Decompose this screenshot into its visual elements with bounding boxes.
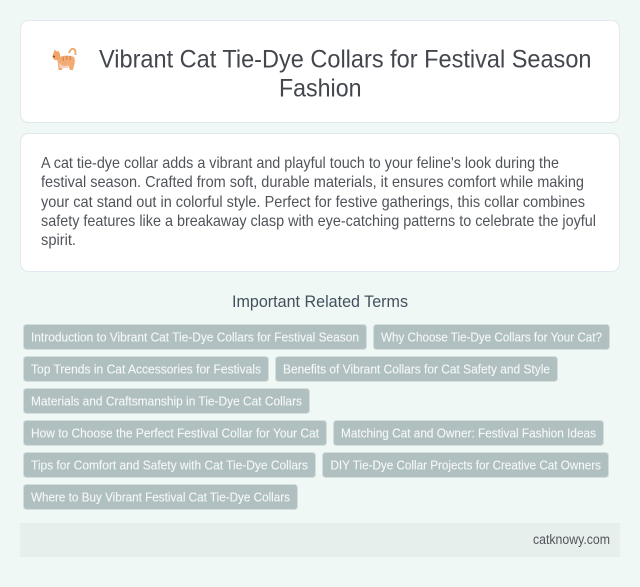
tag: Top Trends in Cat Accessories for Festivals (31, 362, 261, 376)
tag (334, 420, 604, 446)
tag: Where to Buy Vibrant Festival Cat Tie-Dye Collars (31, 490, 290, 504)
tag: Benefits of Vibrant Collars for Cat Safety and Style (283, 362, 550, 376)
tag (24, 324, 366, 350)
tag: Tips for Comfort and Safety with Cat Tie-Dye Collars (31, 458, 308, 472)
description text: festival season. Crafted from soft, durable materials, it ensures comfort while making (41, 174, 584, 191)
description text: spirit. (41, 232, 76, 249)
tag: How to Choose the Perfect Festival Collar for Your Cat (31, 426, 319, 440)
footer (20, 523, 620, 557)
heading: important related terms: Important Related Terms (232, 293, 408, 311)
description text: A cat tie-dye collar adds a vibrant and playful touch to your feline's look during the (41, 155, 559, 172)
footer: catknowy.com (533, 532, 610, 547)
tag (374, 324, 610, 350)
icon: cat (52, 49, 76, 70)
tag (24, 388, 310, 414)
description text: safety features like a breakaway clasp with eye-catching patterns to celebrate the joyful (41, 213, 596, 230)
tag (24, 484, 298, 510)
tag: Matching Cat and Owner: Festival Fashion Ideas (341, 426, 596, 440)
tag: Materials and Craftsmanship in Tie-Dye Cat Collars (31, 394, 302, 408)
title text (99, 46, 592, 102)
tag: DIY Tie-Dye Collar Projects for Creative Cat Owners (330, 458, 601, 472)
tag: Introduction to Vibrant Cat Tie-Dye Collars for Festival Season (31, 330, 359, 344)
tag: Why Choose Tie-Dye Collars for Your Cat? (381, 330, 602, 344)
panel: description card (20, 134, 620, 272)
panel: related term tags (24, 324, 610, 510)
tag (24, 420, 326, 446)
title text: Fashion (279, 74, 362, 102)
panel: title card (20, 20, 620, 122)
tag (322, 452, 608, 478)
tag (276, 356, 558, 382)
description text (41, 155, 596, 249)
title text: Vibrant Cat Tie-Dye Collars for Festival Season (99, 46, 592, 74)
tag (24, 452, 316, 478)
tag (24, 356, 268, 382)
description text: your cat stand out in colorful style. Perfect for festive gatherings, this collar combines (41, 194, 585, 211)
